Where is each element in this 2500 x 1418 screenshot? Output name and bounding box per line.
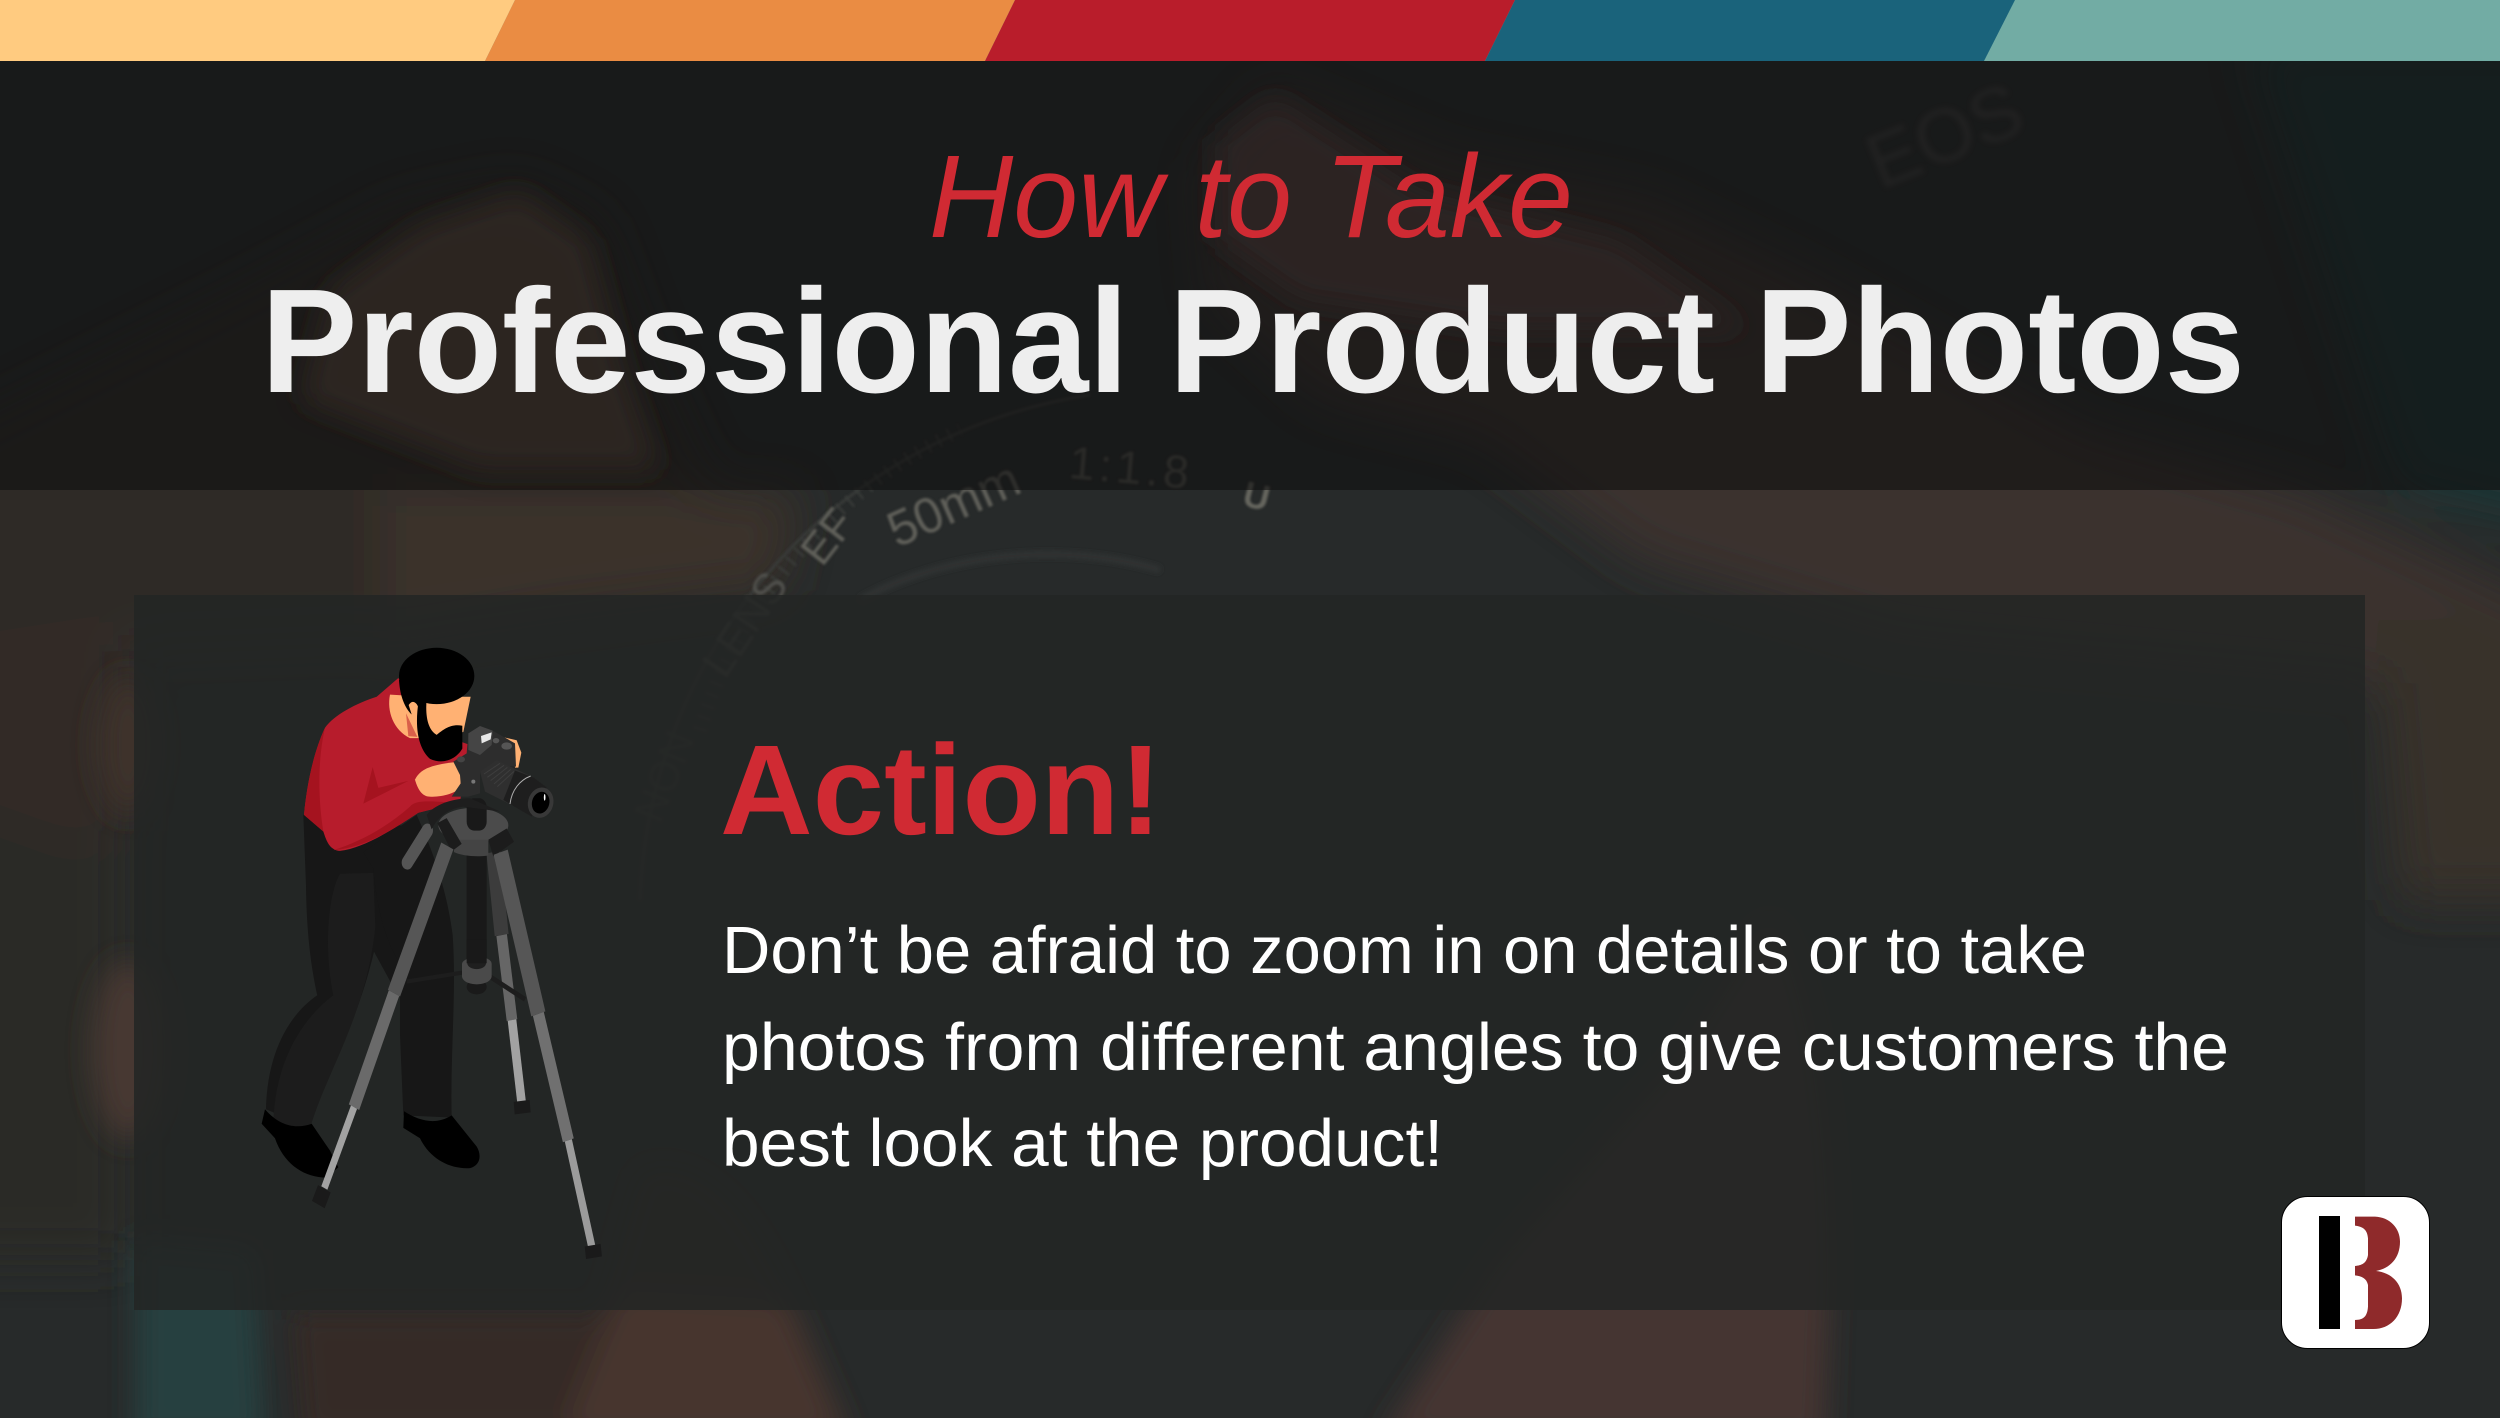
lens rim and engraved lens text: U (1239, 473, 1274, 519)
tripod back leg (493, 852, 522, 1103)
tripod head (427, 798, 514, 856)
header panel (0, 61, 2500, 490)
lens rim and engraved lens text (625, 67, 2035, 900)
tripod right leg (501, 852, 594, 1258)
tripod centre column (407, 815, 525, 999)
title: Professional Product Photos: Professional Product Photos (261, 259, 2245, 424)
lens rim and engraved lens text: EF (791, 500, 865, 574)
heading: Action!: Action! (720, 719, 1162, 862)
lens rim and engraved lens text: EOS (1855, 67, 2035, 206)
tripod left leg (318, 846, 447, 1205)
head (389, 648, 474, 761)
camera (452, 726, 557, 821)
shoes (262, 1109, 480, 1178)
body text: Don’t be afraid to zoom in on details or to take (722, 913, 2087, 988)
body text: best look at the product! (722, 1106, 1443, 1181)
top colour stripe (0, 0, 2500, 61)
hands (415, 735, 521, 797)
shirt (304, 678, 468, 851)
logo (2282, 1196, 2430, 1348)
icon: photographer with camera on tripod (262, 648, 594, 1258)
fingertip highlights inside header (300, 95, 1750, 470)
body text (722, 913, 2229, 1181)
lens rim and engraved lens text: 1 : 1 . 8 (1067, 436, 1191, 498)
lens rim and engraved lens text: LENS (693, 563, 798, 686)
lens rim and engraved lens text: 50mm (879, 450, 1028, 558)
tripod handle (407, 831, 427, 863)
photographer legs (266, 815, 454, 1128)
lens rim and engraved lens text: NON (625, 724, 703, 828)
content panel (134, 595, 2365, 1310)
title: How to Take: How to Take (929, 131, 1573, 263)
body text: photos from different angles to give customers the (722, 1010, 2229, 1085)
